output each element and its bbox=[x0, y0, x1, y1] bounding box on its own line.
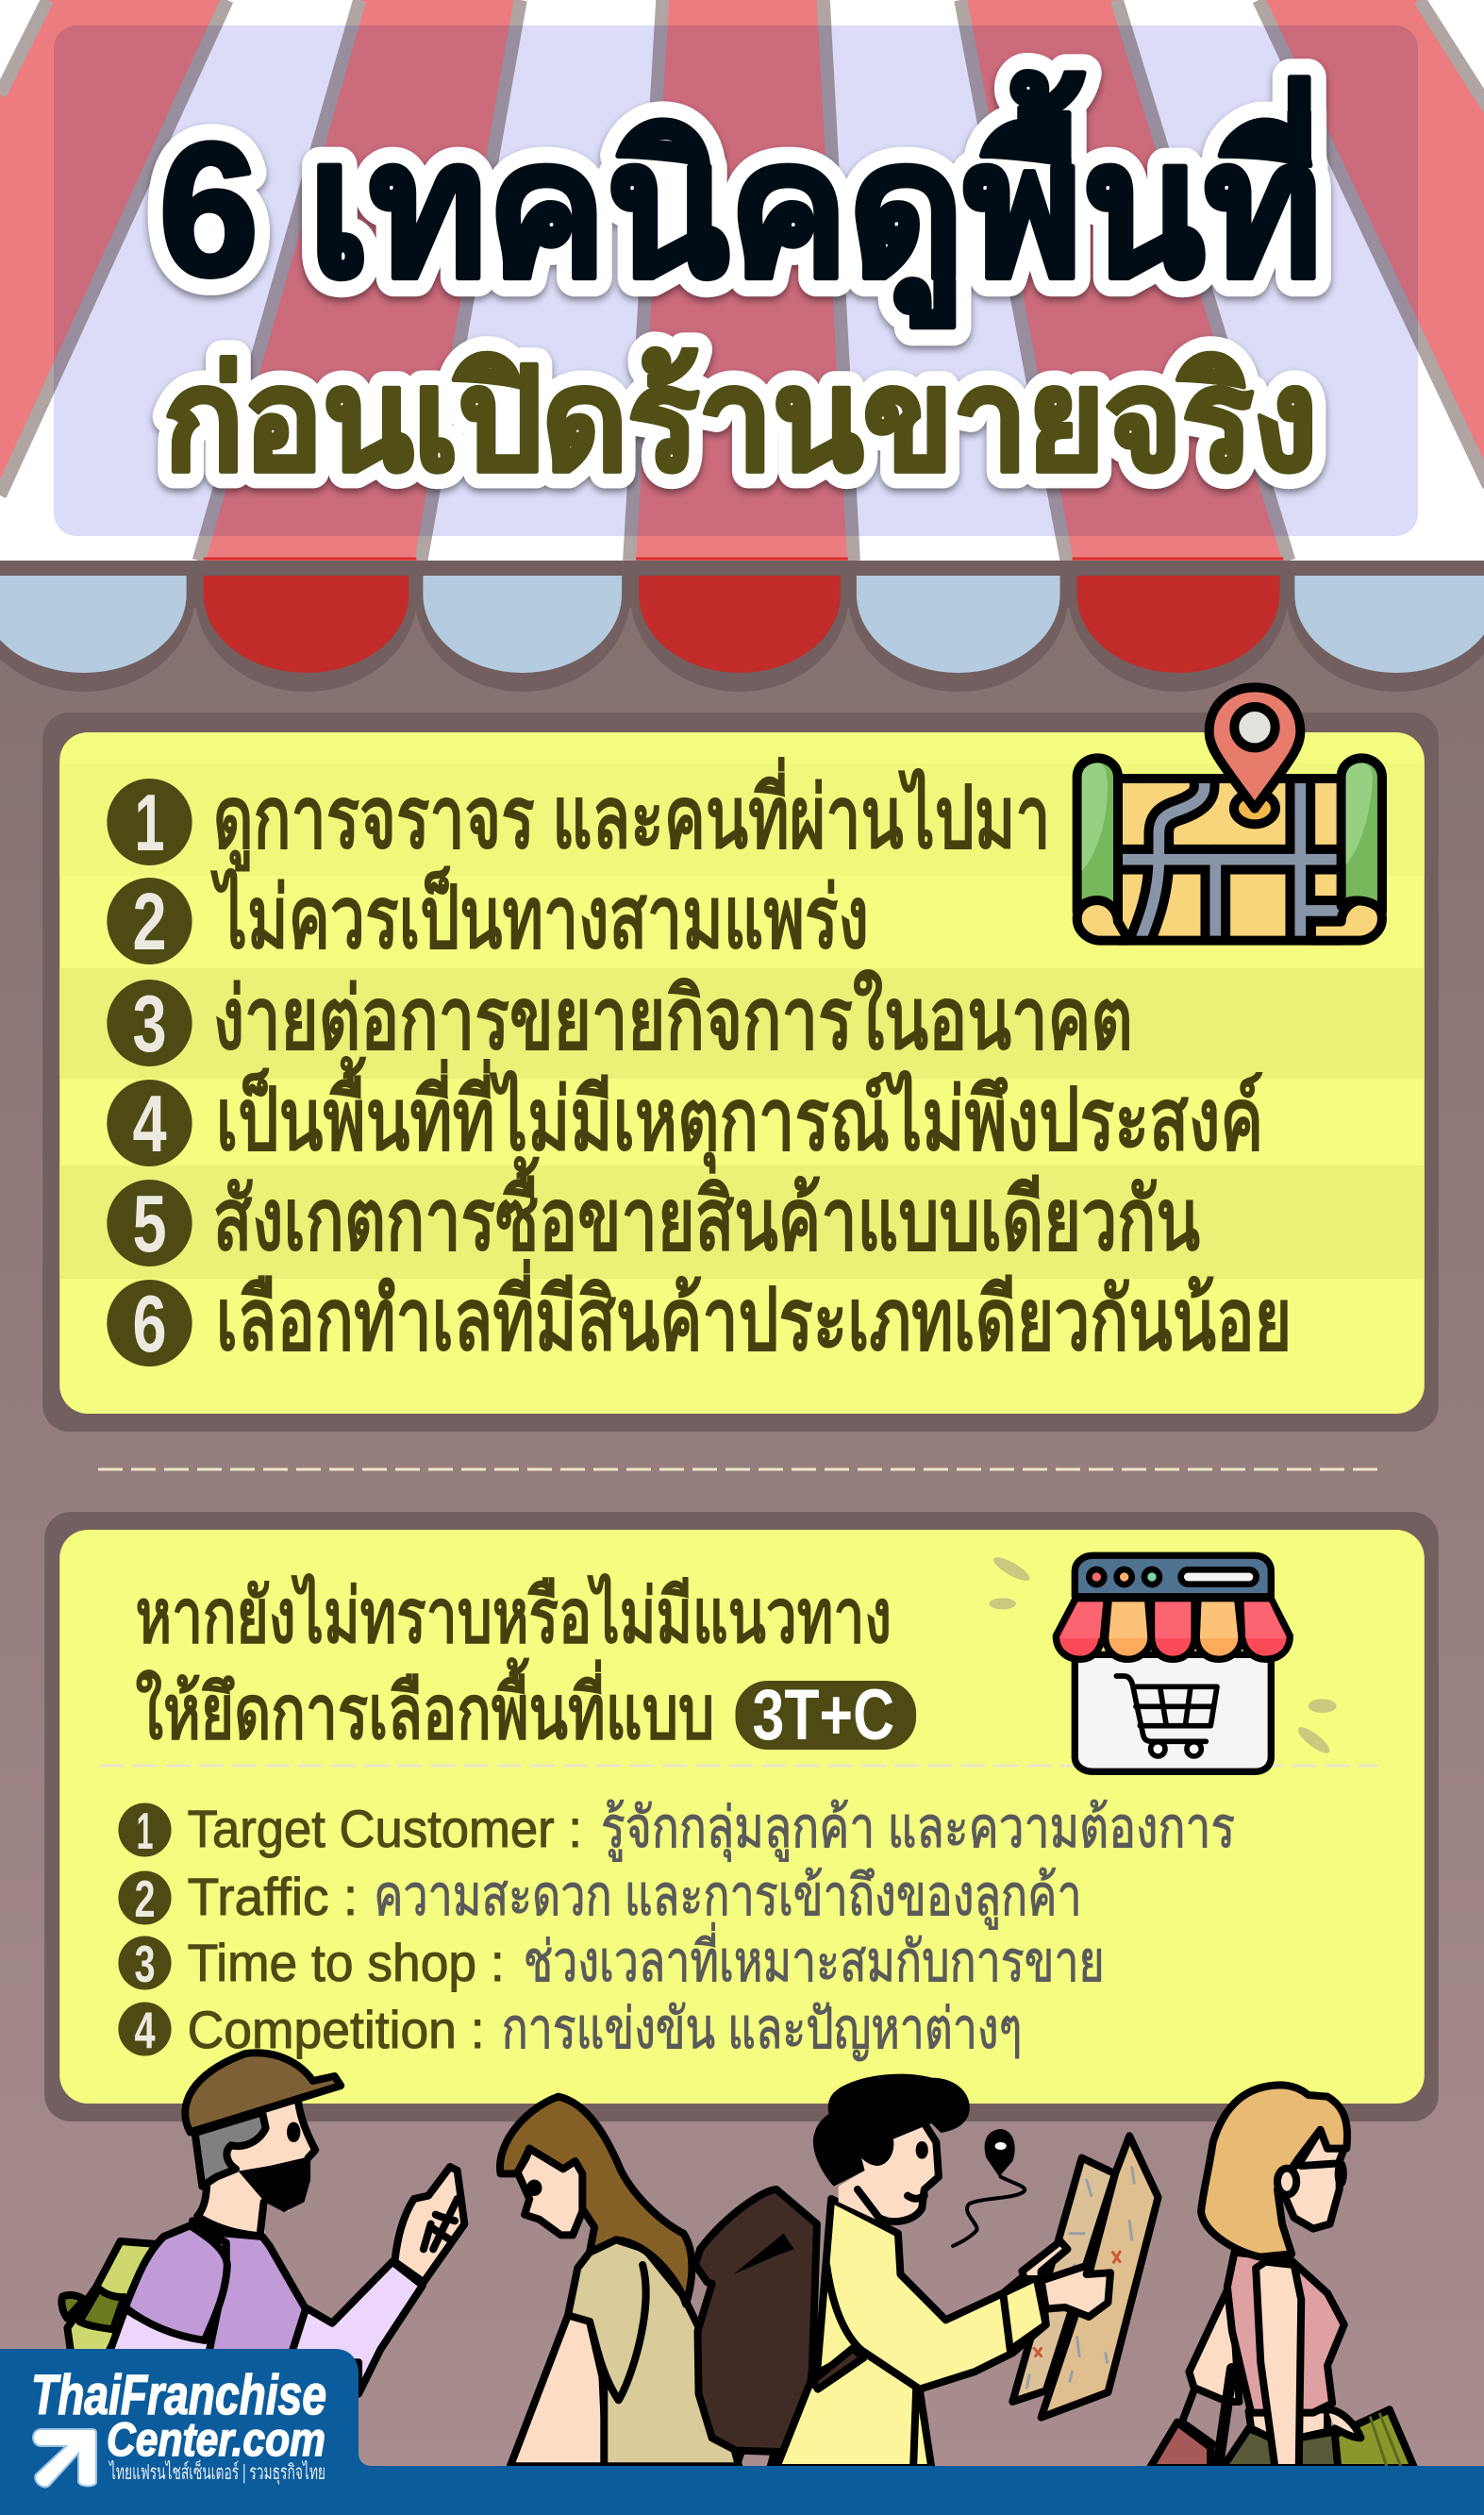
list item 1: 1 bbox=[136, 1802, 154, 1860]
list item 1: Target Customer : bbox=[188, 1799, 582, 1858]
illustration: woman with shopping bags bbox=[1150, 2085, 1414, 2468]
item 5 bbox=[107, 1155, 1200, 1269]
item 1: ดูการจราจร และคนที่ผ่านไปมา bbox=[213, 756, 1051, 872]
item 3 bbox=[107, 969, 1133, 1069]
illustration: man with cap and phone bbox=[61, 2053, 464, 2394]
item 6 bbox=[107, 1258, 1292, 1369]
icon: map with location pin bbox=[1077, 687, 1382, 947]
icon: online shop with cart bbox=[989, 1553, 1337, 1771]
icon: arrow bbox=[33, 2429, 96, 2487]
heading: advice line 1: หากยังไม่ทราบหรือไม่มีแนวทาง bbox=[135, 1572, 892, 1658]
awning: striped roof bbox=[0, 0, 1484, 562]
list item 4 bbox=[118, 1997, 1022, 2061]
list item 4: 4 bbox=[134, 2001, 156, 2059]
heading: advice line 2: ให้ยึดการเลือกพื้นที่แบบ bbox=[135, 1656, 714, 1754]
list item 3 bbox=[118, 1922, 1105, 1993]
item 5: 5 bbox=[132, 1180, 167, 1269]
item 3: 3 bbox=[132, 980, 167, 1069]
list item 3: Time to shop : bbox=[188, 1933, 505, 1992]
title text: 6 เทคนิคดูพื้นที่ bbox=[159, 71, 1322, 327]
title text bbox=[159, 71, 1322, 499]
list item 1 bbox=[118, 1796, 1235, 1862]
item 4: 4 bbox=[132, 1080, 167, 1169]
title text: ก่อนเปิดร้านขายจริง bbox=[164, 341, 1317, 499]
list item 2: Traffic : bbox=[188, 1867, 358, 1926]
list item 3: ช่วงเวลาที่เหมาะสมกับการขาย bbox=[524, 1922, 1105, 1993]
item 2: 2 bbox=[132, 878, 167, 967]
panel: six techniques bbox=[42, 713, 1439, 1432]
map pin and path bbox=[953, 2129, 1025, 2246]
logo: ThaiFranchise Center.com: Center.com bbox=[107, 2413, 325, 2466]
page background bbox=[0, 557, 1484, 2515]
item 1: 1 bbox=[134, 779, 165, 868]
awning: scalloped valance bbox=[0, 561, 1484, 692]
item 4 bbox=[107, 1055, 1263, 1174]
logo: ThaiFranchise Center.com bbox=[0, 2349, 373, 2515]
badge: 3T+C: 3T+C bbox=[753, 1675, 894, 1755]
item 2 bbox=[107, 865, 869, 967]
backpack bbox=[61, 2241, 161, 2362]
list item 2 bbox=[118, 1864, 1082, 1930]
footer band bbox=[0, 2466, 1484, 2515]
list item 2: 2 bbox=[134, 1869, 156, 1928]
divider bbox=[98, 1468, 1379, 1470]
list item 4: การแข่งขัน และปัญหาต่างๆ bbox=[502, 1997, 1022, 2061]
illustration: woman looking at phone bbox=[500, 2097, 739, 2466]
list item 2: ความสะดวก และการเข้าถึงของลูกค้า bbox=[374, 1864, 1082, 1930]
panel: 3T+C advice bbox=[44, 1512, 1439, 2121]
title text: 6 เทคนิคดูพื้นที่ bbox=[159, 71, 1322, 327]
item 2: ไม่ควรเป็นทางสามแพร่ง bbox=[209, 865, 869, 966]
illustration: man reading map bbox=[695, 2074, 1159, 2468]
logo: ThaiFranchise Center.com: ไทยแฟรนไชส์เซ็นเตอร์ | รวมธุรกิจไทย bbox=[108, 2458, 325, 2485]
folded map bbox=[1012, 2136, 1159, 2418]
logo: ThaiFranchise Center.com: ThaiFranchise bbox=[31, 2364, 326, 2426]
item 1 bbox=[107, 756, 1051, 872]
title text: ก่อนเปิดร้านขายจริง bbox=[164, 341, 1317, 499]
list item 4: Competition : bbox=[188, 2000, 485, 2059]
item 6: 6 bbox=[132, 1280, 167, 1369]
title panel bbox=[54, 25, 1418, 536]
list item 3: 3 bbox=[134, 1935, 156, 1993]
list item 1: รู้จักกลุ่มลูกค้า และความต้องการ bbox=[601, 1796, 1235, 1862]
item 3: ง่ายต่อการขยายกิจการในอนาคต bbox=[213, 969, 1133, 1067]
big backpack bbox=[695, 2189, 817, 2452]
